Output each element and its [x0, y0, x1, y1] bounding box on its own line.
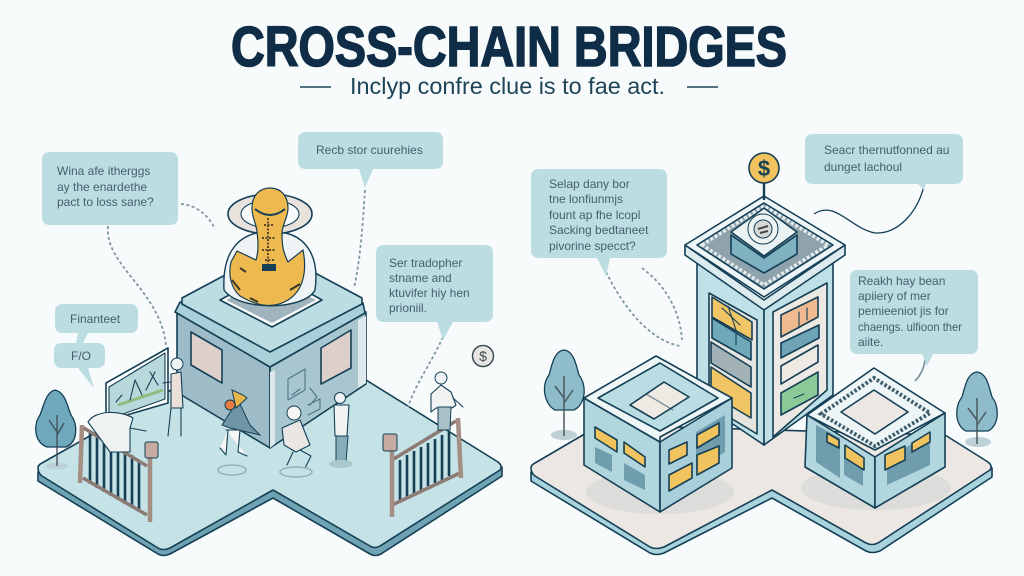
roof document: [630, 382, 689, 419]
callout: reach: apiiery of mer: [858, 289, 931, 303]
wall left: [584, 398, 660, 512]
callout: reach: [850, 270, 978, 366]
tower left face: [697, 262, 764, 445]
building: right office: [801, 368, 951, 510]
connector: top bubble to roof: [354, 190, 365, 288]
connector: tower bubble: [606, 268, 682, 346]
gold statue: [230, 188, 305, 306]
tree: left panel: [36, 390, 76, 470]
roof inset: [598, 363, 718, 431]
person: standing: [329, 392, 353, 468]
building: left office: [584, 356, 734, 514]
callout: search: [805, 134, 963, 190]
tower roof: [685, 196, 845, 297]
connector: bubble one to statue: [181, 204, 215, 229]
callout: transfer: Ser tradopher: [389, 256, 462, 270]
callout: transfer: ktuvifer hiy hen: [389, 286, 470, 300]
callout: what are the gaps: pact to loss sane?: [57, 195, 154, 209]
tree: right panel west: [544, 350, 584, 440]
connector: bubble one to person: [108, 226, 166, 345]
panel glyphs: [722, 306, 807, 398]
wall right: [875, 413, 945, 508]
person: running: [280, 406, 312, 477]
callout: f/o: F/O: [71, 349, 91, 363]
glass dome: [224, 232, 316, 306]
title: CROSS-CHAIN BRIDGES: [231, 15, 787, 79]
right sub-panels: [781, 297, 818, 337]
subtitle: Inclyp confre clue is to fae act.: [350, 73, 665, 99]
callout: what are the gaps: [42, 152, 178, 225]
roof panel: [841, 390, 908, 434]
panel: right platform: [531, 425, 992, 554]
person: dark cloak: [218, 390, 260, 475]
tower: [685, 153, 845, 445]
callout: f/o: [54, 343, 105, 388]
callout: search: dunget lachoul: [824, 160, 902, 174]
right wall: [270, 312, 366, 448]
roof unit: [731, 208, 797, 273]
wall right: [660, 398, 732, 512]
callout: transfer: prioniil.: [389, 301, 427, 315]
fence: right: [383, 418, 461, 517]
panel: left platform: [38, 380, 502, 556]
callout: transfer: stname and: [389, 271, 452, 285]
callout: tower question: tne lonfiunmjs: [549, 192, 623, 206]
board: [106, 348, 168, 421]
callout: tower question: Selap dany bor: [549, 177, 630, 191]
coin: dollar: $: [758, 156, 770, 181]
window right: [321, 330, 351, 384]
connector: right bubble to figure: [408, 337, 443, 407]
windows right: [669, 423, 719, 491]
callout: transfer: [376, 245, 493, 340]
person: at board: [163, 358, 183, 436]
wall schematic: [288, 369, 320, 415]
fence: left: [80, 425, 158, 522]
coin: small dollar: $: [479, 348, 487, 364]
windows: [827, 432, 930, 470]
callout: what are the gaps: Wina afe itherggs: [57, 164, 150, 178]
callout: tower question: [531, 169, 667, 276]
window left: [191, 332, 222, 383]
figures: [88, 358, 463, 477]
callout: finanteet: Finanteet: [70, 312, 121, 326]
callout: finanteet: [55, 304, 138, 343]
callout: reach: pemieeniot jis for: [858, 304, 949, 318]
roof slab: [182, 250, 362, 352]
callout: what are the gaps: ay the enardethe: [57, 180, 147, 194]
statue base: [220, 272, 322, 327]
windows left: [595, 427, 645, 467]
callout: reach: chaengs. ulfioon ther: [858, 320, 962, 334]
connector: lower right: [915, 355, 925, 381]
right panel: [773, 283, 827, 437]
coin: small dollar: [472, 346, 494, 366]
callout: tower question: fount ap fhe lcopl: [549, 208, 640, 222]
callout: tower question: pivorine specct?: [549, 239, 636, 253]
wall left: [805, 415, 875, 508]
person: behind fence: [431, 372, 463, 430]
callout: tower question: Sacking bedtaneet: [549, 223, 649, 237]
connector: top right curve: [814, 186, 924, 233]
tree: right panel east: [957, 372, 997, 447]
left wall: [177, 312, 270, 448]
callout: search: Seacr thernutfonned au: [824, 143, 949, 157]
callout: reach: Reakh hay bean: [858, 274, 945, 288]
halo ring: [228, 194, 312, 234]
person: crouching: [88, 412, 146, 452]
building: vault: [175, 188, 366, 448]
roof layer: [175, 302, 365, 367]
callout: reach: aiite.: [858, 335, 883, 349]
tower right face: [764, 262, 833, 445]
left sub-panels: [712, 297, 752, 340]
callout: reactor: Recb stor cuurehies: [316, 143, 423, 157]
roof frame: [807, 368, 945, 450]
left panel: [709, 293, 757, 434]
tower roof base: [685, 245, 845, 310]
callout: reactor: [298, 132, 443, 188]
coin: dollar: [749, 153, 779, 200]
